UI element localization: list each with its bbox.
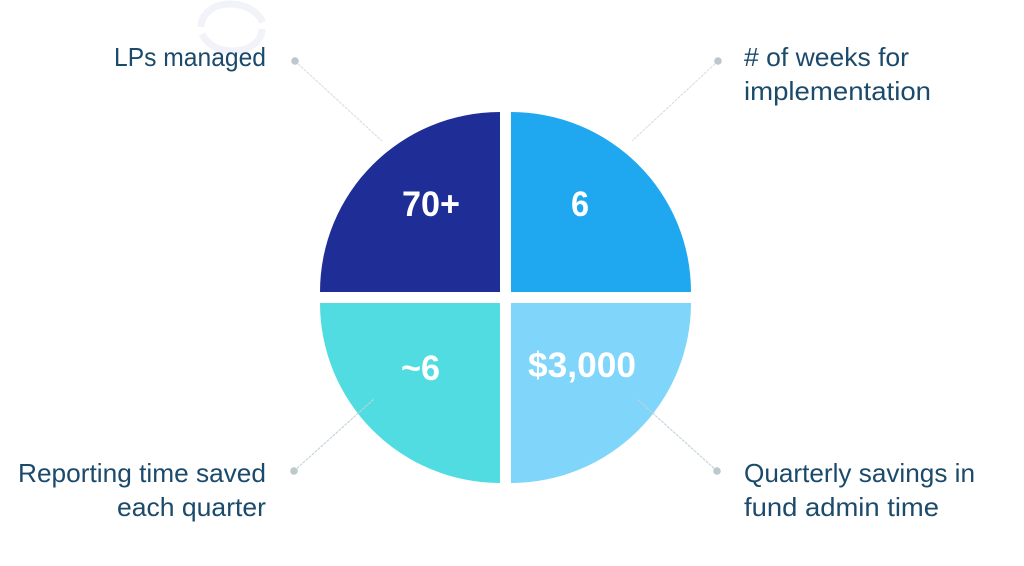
label: quarterly savings: fund admin time [744, 492, 939, 522]
panel: LPs managed quadrant [320, 112, 500, 292]
label: LPs managed: LPs managed [114, 42, 266, 72]
label: quarterly savings: Quarterly savings in [744, 458, 975, 488]
label: reporting time saved: each quarter [117, 492, 266, 522]
label: quarterly savings [744, 458, 975, 522]
value: ~6: ~6 [401, 349, 440, 388]
connector: weeks [632, 57, 722, 141]
panel: savings quadrant [511, 303, 691, 483]
connector: savings [637, 399, 721, 475]
label: weeks for implementation [744, 42, 931, 106]
label: weeks for implementation: implementation [744, 76, 931, 106]
icon: faint ring [201, 4, 263, 51]
value: 6: 6 [571, 185, 589, 224]
panel: reporting time quadrant [320, 303, 500, 483]
label: weeks for implementation: # of weeks for [744, 42, 909, 72]
connector: reporting time [290, 399, 374, 475]
label: reporting time saved: Reporting time saved [18, 458, 266, 488]
panel: weeks quadrant [511, 112, 691, 292]
label: reporting time saved [18, 458, 266, 522]
connector: LPs managed [291, 57, 382, 141]
value: $3,000: $3,000 [528, 346, 636, 385]
value: 70+: 70+ [402, 185, 460, 224]
